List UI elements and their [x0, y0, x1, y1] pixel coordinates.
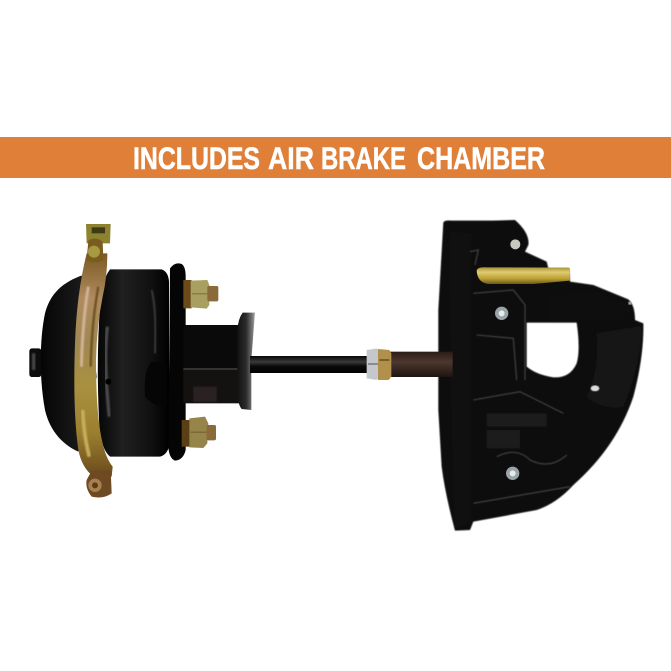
clamp band [74, 253, 113, 477]
push rod [250, 356, 368, 373]
banner: includes air brake chamber [0, 137, 671, 178]
latch body highlight [546, 292, 632, 322]
mounting block [183, 325, 240, 403]
upper pivot eye [510, 239, 520, 249]
embossed lettering texture [487, 413, 547, 448]
silver bolt upper [495, 307, 508, 320]
rear plate edge [449, 232, 472, 528]
air brake chamber assembly [29, 224, 255, 497]
casting ridges [470, 250, 570, 503]
banner heading: INCLUDES [133, 140, 260, 176]
end plate disc [237, 313, 255, 410]
latch pin [477, 267, 570, 284]
banner heading: BRAKE [321, 140, 406, 176]
banner heading [133, 140, 545, 176]
pintle hook assembly [367, 220, 643, 531]
main chamber body [98, 269, 169, 457]
threaded sleeve [389, 352, 453, 377]
bottom clamp ear and bolt [86, 470, 112, 497]
adjusting nuts [367, 348, 391, 380]
hook curve highlights [587, 302, 642, 407]
top clamp ear and bolt [86, 224, 111, 262]
lower bolt and nut [182, 417, 216, 448]
banner heading: CHAMBER [417, 140, 545, 176]
silver bolt lower [506, 467, 519, 480]
hook body [438, 220, 643, 531]
rear stud [29, 348, 41, 377]
upper bolt and nut [183, 280, 218, 309]
rear dome housing [41, 275, 97, 452]
banner heading: AIR [268, 140, 314, 176]
mounting flange [168, 263, 186, 461]
